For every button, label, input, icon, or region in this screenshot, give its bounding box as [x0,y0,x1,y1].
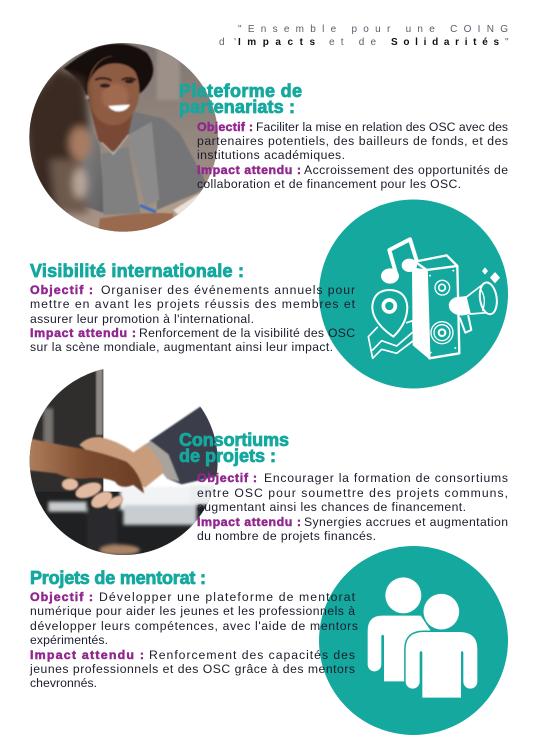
text block: objectif and impact: Organiser des événements annuels pour [101,283,355,297]
text block: objectif and impact: Accroissement des opportunités de [304,163,508,177]
text block: objectif and impact: du nombre de projets financés. [197,529,376,543]
text block: objectif and impact: Impact attendu : [197,163,301,177]
text block: objectif and impact: Renforcement de la visibilité des OSC [139,326,355,340]
photo: handshake [30,369,218,555]
header tagline: d' [219,37,236,48]
text block: objectif and impact [197,120,508,191]
text block: objectif and impact: Encourager la formation de consortiums [264,471,508,485]
text block: objectif and impact: collaboration et de financement pour les OSC. [197,177,461,191]
text block: objectif and impact: Développer une plateforme de mentorat [99,590,356,604]
text block: objectif and impact [29,590,358,690]
text block: objectif and impact: mettre en avant les projets réussis des membres et [30,297,356,311]
title: Visibilité internationale : [30,261,244,281]
text block: objectif and impact: augmentant ainsi les chances de financement. [197,500,466,514]
text block: objectif and impact: assurer leur promotion à l'international. [30,312,254,326]
teal circle [319,546,508,735]
icon: speaker, music note, pin and megaphone [368,239,500,358]
text block: objectif and impact: Objectif : [197,471,257,485]
title: Plateforme de [179,81,302,101]
text block: objectif and impact: Impact attendu : [197,515,301,529]
title: de projets : [179,446,276,466]
text block: objectif and impact: Objectif : [30,283,93,297]
header tagline: Impacts [238,37,315,48]
text block: objectif and impact [197,471,508,543]
header tagline: "Ensemble pour une COING [238,24,508,35]
text block: objectif and impact [30,283,356,354]
panel: projets de mentorat [29,546,508,735]
title: partenariats : [179,97,295,117]
header tagline: et de [329,37,376,48]
text block: objectif and impact: développer leurs compétences, avec l'aide de mentors [30,619,358,633]
panel: visibilité internationale [30,200,508,388]
photo: smiling woman in a meeting [29,43,218,232]
title [179,430,289,466]
teal circle [319,200,508,388]
title: Projets de mentorat : [30,568,206,588]
text block: objectif and impact: Objectif : [30,590,93,604]
text block: objectif and impact: numérique pour aider les jeunes et les professionnels à [30,604,355,618]
text block: objectif and impact: Faciliter la mise en relation des OSC avec des [256,120,508,134]
text block: objectif and impact: Objectif : [197,120,253,134]
text block: objectif and impact: Renforcement des capacités des [149,648,355,662]
text block: objectif and impact: Impact attendu : [30,648,144,662]
panel: consortiums de projets [20,365,508,558]
text block: objectif and impact: entre OSC pour soumettre des projets communs, [197,486,508,500]
text block: objectif and impact: institutions académiques. [197,148,345,162]
text block: objectif and impact: jeunes professionnels et des OSC grâce à des mentors [29,662,355,676]
panel: plateforme de partenariats [23,40,508,240]
title [179,81,302,117]
header tagline: " [505,37,509,48]
header tagline [219,24,509,48]
text block: objectif and impact: partenaires potentiels, des bailleurs de fonds, et des [197,134,508,148]
text block: objectif and impact: Synergies accrues et augmentation [304,515,508,529]
header tagline: Solidarités [391,37,499,48]
icon: two people [368,577,477,698]
text block: objectif and impact: chevronnés. [30,676,97,690]
title: Consortiums [179,430,289,450]
text block: objectif and impact: sur la scène mondiale, augmentant ainsi leur impact. [30,340,333,354]
text block: objectif and impact: expérimentés. [30,633,108,647]
text block: objectif and impact: Impact attendu : [30,326,136,340]
